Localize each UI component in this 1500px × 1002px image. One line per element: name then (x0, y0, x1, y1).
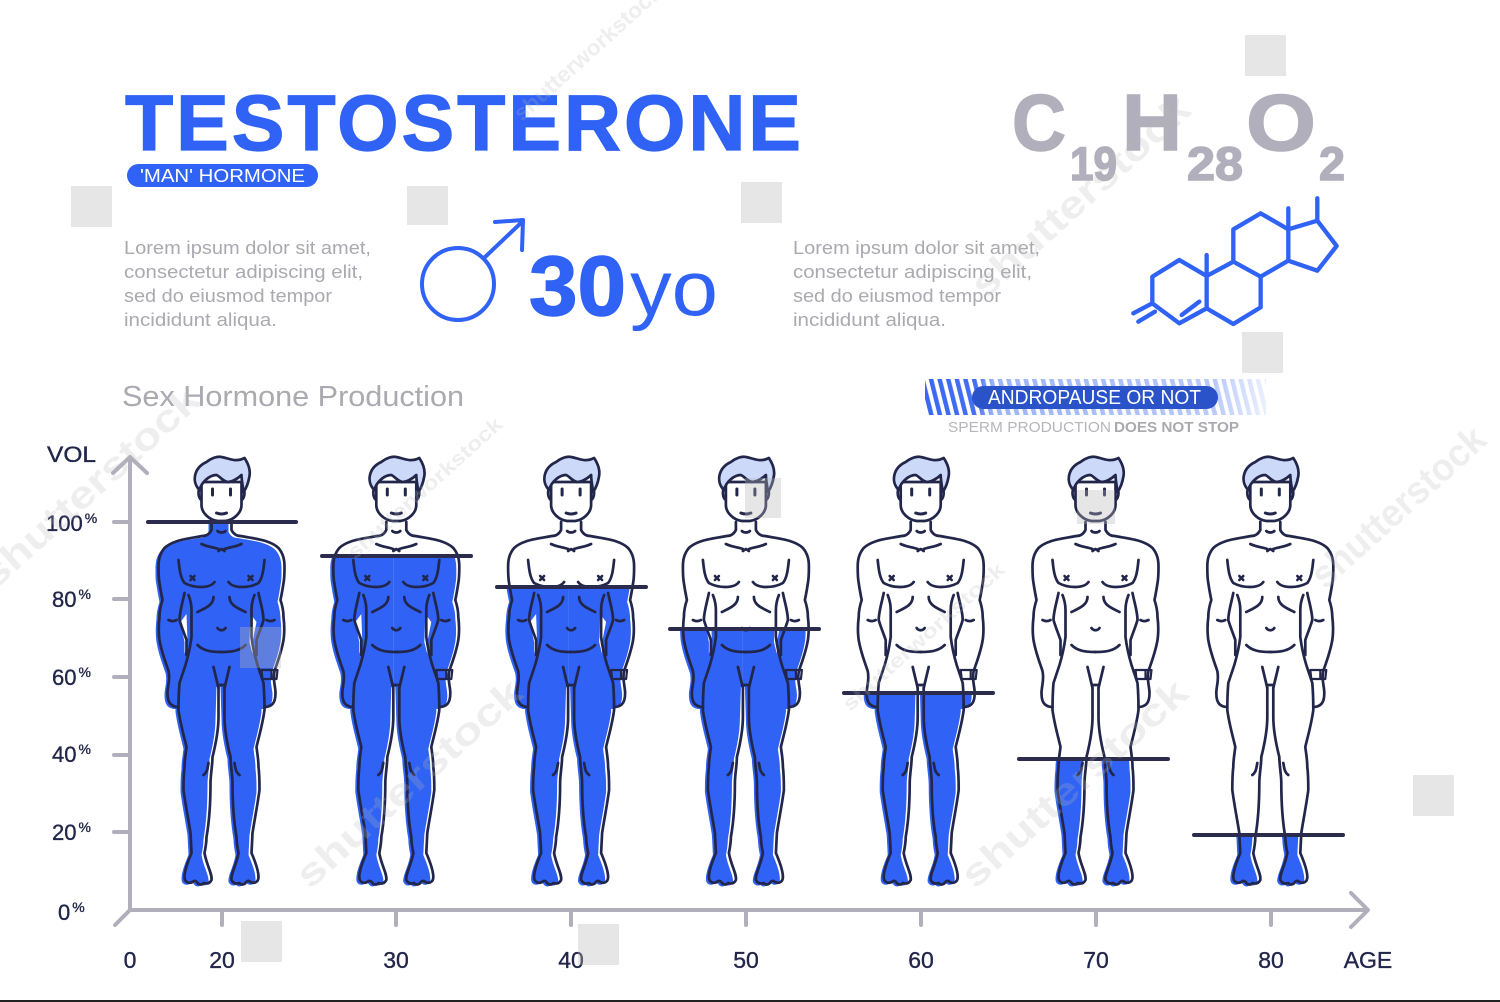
figure: age 20, 100% level (148, 457, 296, 886)
text block: right lorem: incididunt aliqua. (793, 310, 946, 330)
chemical formula: 19 (1070, 137, 1117, 190)
text block: left lorem: incididunt aliqua. (124, 310, 277, 330)
watermark text: shutterworkstock (344, 413, 508, 564)
figure: age 50, 72% level (670, 457, 819, 886)
x axis labels: AGE (1344, 947, 1392, 973)
chemical formula: C (1012, 78, 1066, 167)
chemical formula: O (1246, 78, 1316, 167)
text block: left lorem: sed do eiusmod tempor (124, 286, 332, 306)
watermark text: shutterstock (1303, 418, 1495, 597)
caption: sperm production (948, 420, 1239, 436)
age label 30yo: 30 (529, 239, 626, 333)
chemical formula: 2 (1319, 137, 1345, 190)
caption: sperm production: SPERM PRODUCTION (948, 420, 1111, 436)
y axis labels: 20 (52, 820, 76, 845)
x axis labels: 20 (209, 947, 235, 973)
y axis labels: 0 (58, 900, 70, 925)
x axis labels: 0 (124, 947, 136, 973)
y axis labels: 40 (52, 742, 76, 767)
x axis labels: 30 (383, 947, 409, 973)
text block: right lorem: Lorem ipsum dolor sit amet, (793, 238, 1040, 258)
watermark text: shutterstock (963, 87, 1200, 307)
watermark text: shutterworkstock (839, 558, 1010, 716)
chemical formula (1012, 78, 1345, 190)
text block: right lorem (793, 238, 1040, 330)
subtitle pill (127, 164, 318, 187)
text block: right lorem: consectetur adipiscing elit, (793, 262, 1032, 282)
y axis labels: 60 (52, 665, 76, 690)
chart axes (113, 457, 1368, 927)
badge: andropause or not: ANDROPAUSE OR NOT (988, 387, 1201, 409)
figure: age 30, 90% level (322, 457, 471, 886)
y axis labels: % (85, 510, 97, 526)
figure: age 80, 20% level (1194, 457, 1343, 886)
watermark text: shutterstock (288, 671, 532, 897)
title: TESTOSTERONE (125, 78, 801, 167)
x axis labels: 70 (1083, 947, 1109, 973)
y axis labels: % (72, 899, 85, 915)
chemical formula: 28 (1187, 137, 1243, 190)
age label 30yo (529, 239, 718, 333)
figure: age 70, 39% level (1019, 457, 1168, 886)
x axis labels: 50 (733, 947, 759, 973)
bottom edge strip (0, 1000, 1500, 1002)
y axis labels (46, 442, 97, 925)
y axis labels: % (78, 586, 91, 602)
heading: sex hormone production: Sex Hormone Production (122, 381, 464, 413)
icon: testosterone molecule (1133, 198, 1337, 324)
text block: right lorem: sed do eiusmod tempor (793, 286, 1001, 306)
y axis labels: % (78, 664, 91, 680)
y axis labels: 80 (52, 587, 76, 612)
x axis labels: 80 (1258, 947, 1284, 973)
y axis labels: % (78, 741, 91, 757)
y axis labels: VOL (47, 442, 96, 467)
badge: andropause or not (925, 379, 1266, 415)
chemical formula: H (1122, 78, 1182, 167)
text block: left lorem (124, 238, 371, 330)
text block: left lorem: Lorem ipsum dolor sit amet, (124, 238, 371, 258)
figure: age 60, 56% level (844, 457, 993, 886)
icon: male symbol (422, 220, 523, 320)
watermark text: shutterstock (953, 671, 1197, 897)
subtitle pill: 'MAN' HORMONE (140, 166, 305, 186)
x axis labels: 60 (908, 947, 934, 973)
figure: age 40, 83% level (497, 457, 646, 886)
caption: sperm production: DOES NOT STOP (1114, 420, 1239, 436)
x axis labels: 40 (558, 947, 584, 973)
y axis labels: 100 (46, 511, 83, 536)
y axis labels: % (78, 819, 91, 835)
x axis labels (124, 947, 1392, 973)
text block: left lorem: consectetur adipiscing elit, (124, 262, 363, 282)
age label 30yo: yo (630, 244, 718, 332)
